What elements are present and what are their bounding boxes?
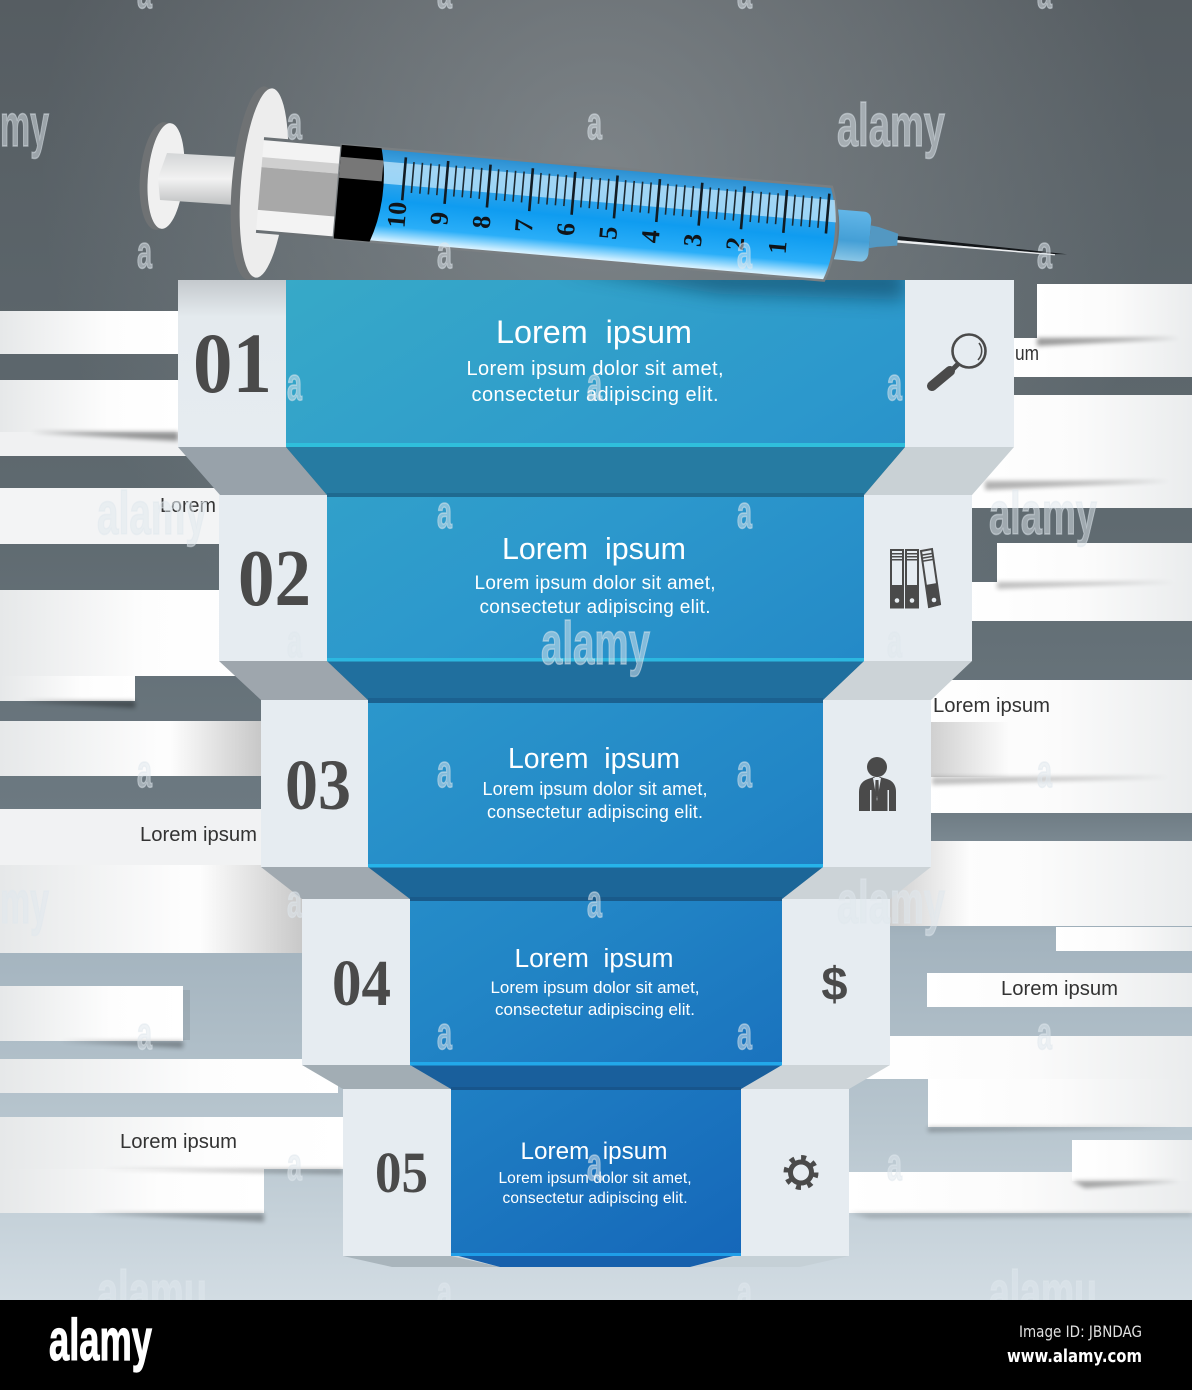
scale numbers: 1 bbox=[763, 240, 793, 255]
icon: gear bbox=[786, 1158, 816, 1188]
blue liquid barrel bbox=[334, 145, 840, 281]
watermark: alamy logos and repeated letters: a bbox=[287, 97, 302, 149]
syringe bbox=[135, 84, 1071, 302]
step 5 text: Lorem ipsum dolor sit amet, bbox=[498, 1170, 692, 1187]
right paper strips bbox=[845, 284, 1192, 1218]
watermark: alamy logos and repeated letters: a bbox=[287, 1138, 302, 1190]
scale numbers bbox=[381, 201, 793, 262]
strip labels: Lorem ipsum bbox=[1001, 978, 1118, 1000]
icon: dollar sign: $ bbox=[821, 957, 848, 1010]
icon: businessman bbox=[859, 757, 896, 811]
watermark: alamy logos and repeated letters: alamy bbox=[837, 92, 945, 159]
step 4 text: Lorem ipsum dolor sit amet, bbox=[490, 978, 700, 997]
plunger rod bbox=[158, 153, 238, 205]
step 3 text: Lorem ipsum dolor sit amet, bbox=[482, 779, 708, 799]
scale numbers: 3 bbox=[678, 232, 708, 248]
step 3 text: consectetur adipiscing elit. bbox=[487, 802, 703, 822]
watermark: alamy logos and repeated letters: my bbox=[0, 869, 49, 936]
nozzle hub bbox=[834, 209, 872, 262]
watermark: alamy logos and repeated letters: a bbox=[137, 1007, 152, 1059]
strip labels: Lorem ipsum bbox=[120, 1131, 237, 1153]
watermark: alamy logos and repeated letters: a bbox=[137, 226, 152, 278]
watermark: alamy logos and repeated letters: a bbox=[587, 358, 602, 410]
step 5 number: 05 bbox=[375, 1140, 428, 1205]
strip labels: um bbox=[1015, 343, 1039, 365]
scale numbers: 4 bbox=[636, 229, 666, 244]
step 4 text: consectetur adipiscing elit. bbox=[495, 1000, 695, 1019]
watermark: alamy logos and repeated letters: a bbox=[1037, 1007, 1052, 1059]
step 2 text bbox=[474, 573, 716, 618]
step 4 panel bbox=[302, 899, 890, 1090]
watermark: alamy logos and repeated letters: a bbox=[587, 97, 602, 149]
watermark: alamy logos and repeated letters: a bbox=[737, 226, 752, 278]
footer image id: Image ID: JBNDAG bbox=[1019, 1322, 1142, 1341]
watermark: alamy logos and repeated letters: a bbox=[887, 615, 902, 667]
plunger section bbox=[256, 137, 344, 240]
watermark: alamy logos and repeated letters: alamy bbox=[541, 610, 650, 677]
scale numbers: 5 bbox=[593, 225, 623, 241]
scale numbers: 10 bbox=[381, 201, 413, 229]
step 3 panel bbox=[261, 700, 931, 901]
watermark: alamy logos and repeated letters: a bbox=[287, 615, 302, 667]
left paper strips bbox=[0, 311, 346, 1222]
watermark: alamy logos and repeated letters: a bbox=[737, 745, 752, 797]
scale ticks bbox=[402, 157, 829, 237]
icon: binders bbox=[891, 549, 941, 608]
watermark: alamy logos and repeated letters: a bbox=[1037, 745, 1052, 797]
strip labels: Lorem bbox=[160, 495, 216, 517]
front flange bbox=[224, 84, 295, 282]
step 1 number: 01 bbox=[193, 315, 272, 411]
step 2 number: 02 bbox=[238, 535, 311, 623]
watermark: alamy logos and repeated letters: a bbox=[287, 875, 302, 927]
watermark: alamy logos and repeated letters: a bbox=[437, 226, 452, 278]
icon: magnifying glass bbox=[932, 334, 986, 386]
step 1 text: Lorem ipsum dolor sit amet, bbox=[466, 358, 724, 380]
watermark: alamy logos and repeated letters: a bbox=[1037, 226, 1052, 278]
scale numbers: 2 bbox=[720, 236, 750, 252]
heading 5: Lorem ipsum bbox=[520, 1138, 668, 1165]
watermark: alamy logos and repeated letters: alamu bbox=[97, 1259, 207, 1326]
heading 1: Lorem ipsum bbox=[496, 314, 692, 350]
heading 3: Lorem ipsum bbox=[508, 743, 680, 775]
step 3 number: 03 bbox=[285, 745, 351, 825]
step 4 number: 04 bbox=[332, 947, 391, 1020]
watermark: alamy logos and repeated letters: a bbox=[587, 1138, 602, 1190]
step 5 text bbox=[498, 1170, 692, 1207]
watermark: alamy logos and repeated letters: a bbox=[137, 745, 152, 797]
watermark: alamy logos and repeated letters: a bbox=[437, 745, 452, 797]
watermark: alamy logos and repeated letters: a bbox=[287, 358, 302, 410]
watermark: alamy logos and repeated letters: a bbox=[737, 486, 752, 538]
heading 4: Lorem ipsum bbox=[514, 943, 674, 973]
watermark: alamy logos and repeated letters: alamy bbox=[837, 869, 945, 936]
watermark: alamy logos and repeated letters: a bbox=[437, 1266, 452, 1318]
watermark: alamy logos and repeated letters: alamu bbox=[989, 1259, 1097, 1326]
watermark: alamy logos and repeated letters: my bbox=[0, 92, 49, 159]
watermark: alamy logos and repeated letters: a bbox=[437, 486, 452, 538]
footer logo: alamy bbox=[49, 1308, 152, 1373]
strip labels: Lorem ipsum bbox=[140, 824, 257, 846]
watermark: alamy logos and repeated letters: alamy bbox=[97, 480, 207, 547]
watermark: alamy logos and repeated letters: alamy bbox=[989, 480, 1097, 547]
step 5 panel bbox=[343, 1089, 849, 1267]
footer url: www.alamy.com bbox=[1007, 1346, 1142, 1367]
scale numbers: 8 bbox=[467, 214, 497, 230]
nozzle neck bbox=[869, 225, 899, 251]
barrel bbox=[256, 137, 1071, 302]
watermark: alamy logos and repeated letters: a bbox=[437, 1007, 452, 1059]
step 1 text bbox=[466, 358, 724, 406]
rear flange bbox=[135, 120, 189, 232]
scale numbers: 7 bbox=[509, 218, 539, 233]
scale numbers: 9 bbox=[424, 211, 454, 226]
watermark: alamy logos and repeated letters: a bbox=[737, 1266, 752, 1318]
watermark: alamy logos and repeated letters: a bbox=[737, 1007, 752, 1059]
scale numbers: 6 bbox=[551, 222, 581, 237]
watermark: alamy logos and repeated letters: a bbox=[587, 875, 602, 927]
step 5 text: consectetur adipiscing elit. bbox=[502, 1190, 688, 1207]
step 2 text: Lorem ipsum dolor sit amet, bbox=[474, 573, 716, 594]
step 2 text: consectetur adipiscing elit. bbox=[480, 597, 710, 618]
watermark: alamy logos and repeated letters: a bbox=[887, 1138, 902, 1190]
needle bbox=[897, 236, 1067, 257]
strip labels: Lorem ipsum bbox=[933, 695, 1050, 717]
footer bar bbox=[0, 1300, 1192, 1390]
step 1 panel bbox=[178, 268, 1014, 497]
strip labels bbox=[120, 343, 1118, 1153]
watermark: alamy logos and repeated letters: a bbox=[887, 358, 902, 410]
step 3 text bbox=[482, 779, 708, 822]
black stopper bbox=[334, 145, 387, 242]
step 2 panel bbox=[219, 495, 972, 703]
step 1 text: consectetur adipiscing elit. bbox=[472, 384, 718, 406]
step 4 text bbox=[490, 978, 700, 1019]
heading 2: Lorem ipsum bbox=[502, 532, 686, 566]
